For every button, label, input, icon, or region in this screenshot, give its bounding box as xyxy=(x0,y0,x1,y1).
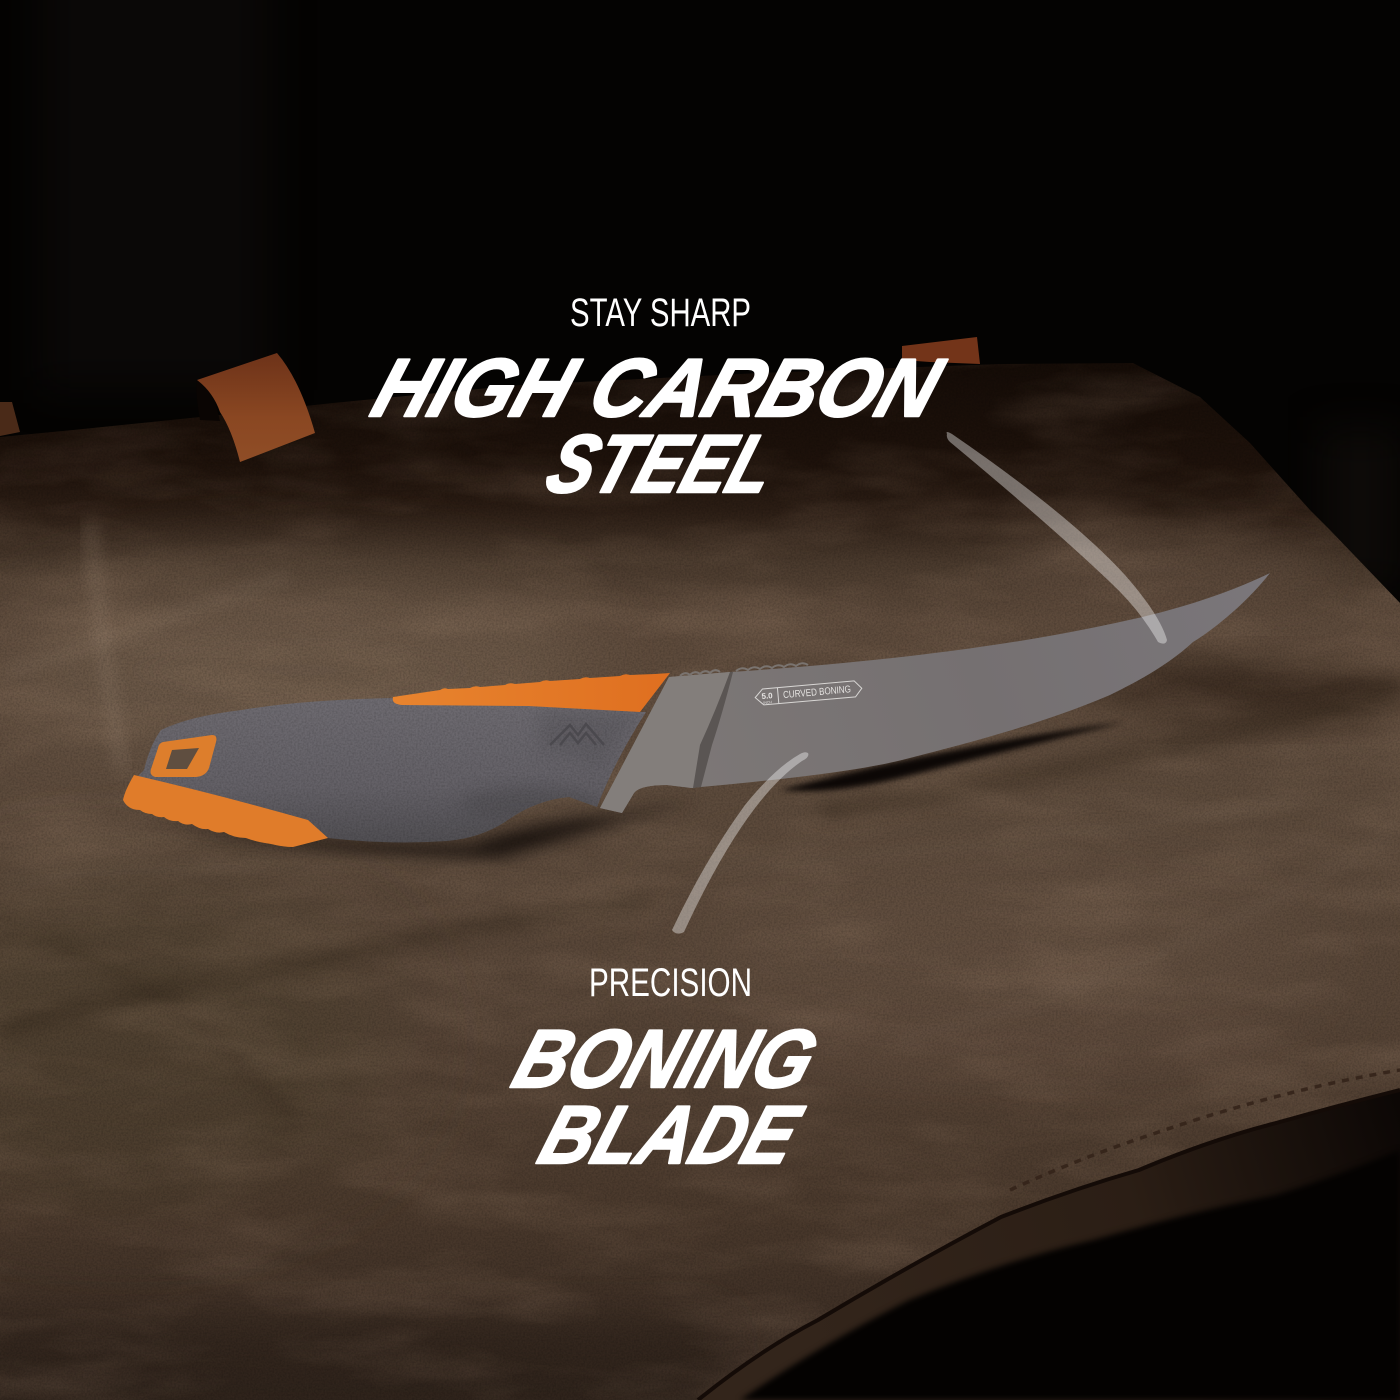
callout: boning blade xyxy=(503,961,828,1181)
leather strap right xyxy=(902,337,980,364)
heading: steel: STEEL xyxy=(536,418,788,510)
blade size label: 5.0 xyxy=(761,691,774,701)
blade spine serrations xyxy=(680,663,808,676)
infographic scene xyxy=(0,298,1400,1400)
heading: high carbon: HIGH CARBON xyxy=(362,342,954,434)
blade xyxy=(600,573,1270,813)
handle logo xyxy=(550,724,604,745)
blade ricasso xyxy=(600,672,730,813)
blade size label: CURVED BONING xyxy=(783,684,852,701)
handle top orange inlay xyxy=(393,673,670,712)
blade size label xyxy=(755,680,862,706)
handle grip xyxy=(138,698,646,842)
cloth light and shadow patches xyxy=(0,520,1400,1400)
cloth lower fold shadow xyxy=(740,1150,1400,1400)
leather strap left xyxy=(196,353,315,462)
handle lanyard ring xyxy=(150,735,216,777)
waxed canvas cloth xyxy=(0,363,1400,1400)
stitching xyxy=(1010,1070,1400,1190)
handle butt orange inlay xyxy=(123,775,328,847)
eyebrow: precision: PRECISION xyxy=(589,961,752,1005)
callout: high carbon steel xyxy=(362,291,954,510)
blade crease xyxy=(693,672,733,788)
eyebrow: stay sharp: STAY SHARP xyxy=(570,291,751,335)
cloth lower hem band xyxy=(698,1090,1400,1400)
callout stroke to blade tip area xyxy=(947,432,1167,644)
blade size label: INCH xyxy=(763,700,773,705)
callout stroke to blade body xyxy=(672,752,808,934)
heading: blade: BLADE xyxy=(529,1089,813,1181)
knife shadow xyxy=(150,722,1125,858)
knife xyxy=(120,573,1270,850)
heading: boning: BONING xyxy=(503,1013,828,1105)
hem crease xyxy=(698,1090,1400,1400)
lanyard hole xyxy=(166,748,199,769)
leather strap edge xyxy=(0,402,20,436)
